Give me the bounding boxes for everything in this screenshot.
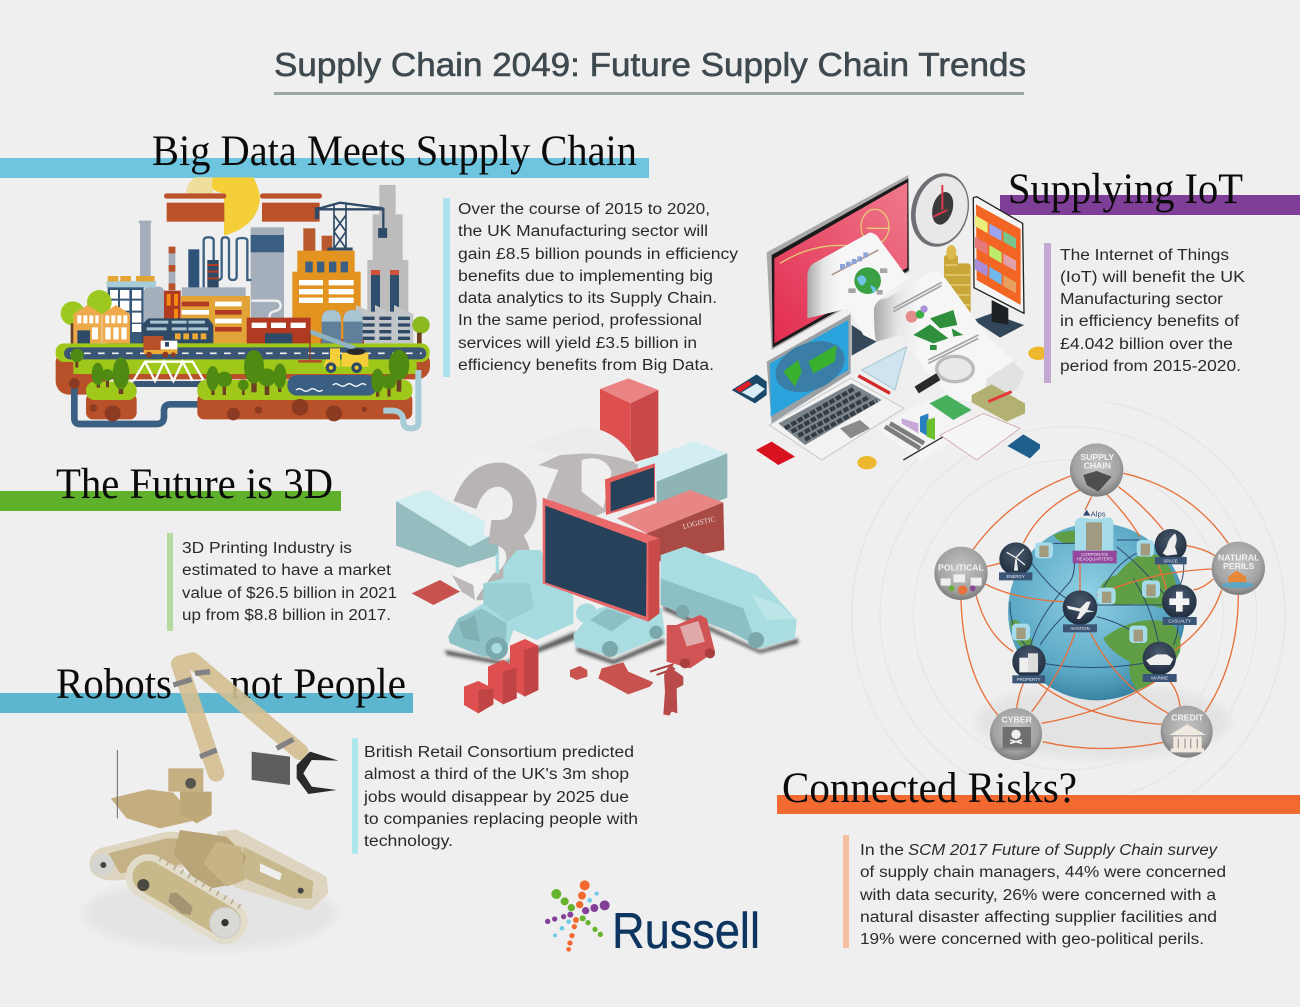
heading bar — [0, 491, 341, 511]
clouds — [164, 193, 322, 222]
car — [573, 602, 665, 657]
globe — [1008, 523, 1185, 700]
display panels — [543, 463, 659, 622]
heading bar — [0, 158, 649, 178]
panel: robots not people — [0, 661, 638, 950]
body text: almost a third of the UK's 3m shop — [364, 766, 629, 783]
heading: Big Data Meets Supply Chain — [152, 128, 637, 175]
navy links — [1010, 540, 1184, 667]
blue card — [1007, 434, 1040, 458]
body text: efficiency benefits from Big Data. — [458, 357, 714, 374]
antenna — [116, 750, 119, 818]
body text — [458, 201, 738, 374]
smartphone — [973, 197, 1024, 338]
body text: jobs would disappear by 2025 due — [363, 789, 629, 806]
front track — [148, 877, 225, 922]
yellow loader — [298, 332, 368, 373]
node: energy — [999, 542, 1033, 580]
body text — [363, 744, 638, 850]
body text: Over the course of 2015 to 2020, — [458, 201, 710, 218]
coin — [1028, 347, 1048, 360]
3d logistics illustration — [396, 378, 798, 716]
body text: £4.042 billion over the — [1060, 336, 1233, 353]
pallets and box — [570, 662, 653, 694]
heading bar — [1000, 195, 1300, 215]
body text: estimated to have a market — [182, 562, 392, 579]
network diagram — [852, 398, 1285, 832]
panel: big data meets supply chain — [0, 128, 738, 428]
hub: political: POLITICAL — [938, 562, 985, 572]
laptop — [767, 314, 904, 460]
hub: natural perils: NATURAL — [1218, 552, 1260, 562]
russell logo — [545, 880, 760, 959]
charts sheet — [877, 398, 977, 460]
forklift — [650, 615, 715, 675]
heading: Supplying IoT — [1008, 166, 1243, 213]
crane — [315, 203, 387, 249]
corporate headquarters: Alps — [1091, 509, 1106, 518]
body text: The Internet of Things — [1060, 247, 1229, 264]
body text: 3D Printing Industry is — [182, 540, 352, 557]
body text: SCM 2017 Future of Supply Chain survey — [908, 842, 1218, 859]
heading: Connected Risks? — [782, 765, 1077, 812]
factory skyline — [107, 185, 413, 344]
sprocket — [137, 879, 149, 891]
hub: political — [934, 547, 988, 600]
hub: supply chain — [1070, 443, 1123, 497]
heading: robots: Robots — [56, 661, 172, 708]
panel: supplying iot — [732, 166, 1300, 469]
hub: natural perils — [1212, 542, 1265, 595]
calculator — [732, 374, 767, 403]
hub: credit — [1161, 706, 1213, 758]
body text: gain £8.5 billion pounds in efficiency — [458, 246, 738, 263]
sun — [186, 177, 260, 236]
vehicle shadows — [445, 605, 798, 665]
heading: not people: not People — [230, 661, 406, 708]
body text — [182, 540, 397, 624]
accent rule — [167, 533, 173, 631]
delivery truck — [143, 336, 177, 358]
body text — [859, 842, 1226, 948]
corporate headquarters: HEADQUARTERS — [1077, 557, 1113, 562]
paper scroll with map — [874, 271, 1024, 402]
body text: benefits due to implementing big — [458, 268, 713, 285]
3D letters — [452, 426, 638, 600]
node: property — [1012, 645, 1046, 683]
body text: in efficiency benefits of — [1060, 313, 1240, 330]
body text: data analytics to its Supply Chain. — [458, 290, 717, 307]
corporate headquarters — [1073, 509, 1117, 563]
body text: (IoT) will benefit the UK — [1060, 269, 1246, 286]
logo wordmark: Russell — [612, 903, 760, 959]
track window — [168, 893, 193, 915]
node: aviation — [1063, 590, 1097, 632]
heading bar — [0, 693, 413, 713]
body text: with data security, 26% were concerned with a — [859, 887, 1216, 904]
accent rule — [1044, 243, 1051, 383]
body text: of supply chain managers, 44% were concerned — [860, 864, 1226, 881]
node: aviation: AVIATION — [1070, 626, 1090, 631]
hub: cyber: CYBER — [1002, 715, 1033, 725]
platform — [111, 768, 212, 828]
node: space: SPACE — [1163, 558, 1178, 563]
coins — [857, 456, 877, 469]
paper scroll with globe — [807, 232, 908, 342]
body text: to companies replacing people with — [364, 811, 638, 828]
Alps site domes — [1012, 540, 1160, 643]
panel: the future is 3d — [0, 378, 798, 716]
red container — [617, 490, 724, 562]
body text: In the — [860, 842, 904, 859]
heading: The Future is 3D — [56, 461, 333, 508]
robot illustration — [83, 661, 338, 950]
trees — [70, 349, 409, 397]
node: marine — [1143, 642, 1177, 682]
red bar blocks — [464, 639, 538, 713]
coin stacks — [944, 245, 971, 315]
set square and pencil — [858, 347, 907, 393]
body text: Manufacturing sector — [1060, 291, 1223, 308]
front wheel — [210, 907, 240, 938]
trees and houses — [61, 290, 430, 344]
corporate headquarters: CORPORATE — [1081, 552, 1108, 557]
track treads — [160, 858, 240, 907]
body text: up from $8.8 billion in 2017. — [182, 607, 391, 624]
worker — [663, 665, 683, 716]
gripper — [252, 752, 338, 794]
devices illustration — [732, 167, 1048, 469]
node: property: PROPERTY — [1017, 677, 1041, 682]
red container: LOGISTIC — [682, 514, 716, 531]
body text: technology. — [364, 833, 453, 850]
body text: British Retail Consortium predicted — [364, 744, 634, 761]
factory illustration — [56, 177, 430, 428]
node: marine: MARINE — [1151, 676, 1168, 681]
shadow — [83, 877, 337, 950]
ground and road — [56, 343, 430, 428]
body text: natural disaster affecting supplier facilities and — [860, 909, 1217, 926]
node: casualty: CASUALTY — [1168, 619, 1191, 624]
hub: credit: CREDIT — [1171, 713, 1204, 723]
red card — [756, 442, 795, 465]
body text: period from 2015-2020. — [1060, 358, 1241, 375]
body text: the UK Manufacturing sector will — [458, 223, 708, 240]
wall clock — [903, 167, 977, 253]
panel: connected risks — [777, 398, 1300, 948]
rear left track — [89, 832, 213, 880]
body text: services will yield £3.5 billion in — [458, 335, 697, 352]
body text: In the same period, professional — [458, 312, 702, 329]
magnifier — [917, 356, 973, 390]
accent rule — [443, 198, 450, 377]
hub: cyber — [990, 708, 1042, 760]
accent rule — [352, 738, 358, 854]
right container — [637, 441, 727, 525]
orange links — [961, 473, 1238, 749]
hub: supply chain: SUPPLY — [1080, 452, 1114, 462]
banknotes — [929, 384, 1025, 422]
front hub — [221, 919, 229, 926]
node: energy: ENERGY — [1007, 574, 1025, 579]
robot arm — [173, 661, 300, 773]
red pallet — [412, 580, 460, 605]
chassis — [173, 830, 247, 890]
title: Supply Chain 2049: Future Supply Chain Trends — [274, 46, 1026, 83]
logo dots — [545, 880, 610, 952]
left container — [396, 490, 500, 568]
desktop monitor — [767, 175, 909, 356]
rear right track — [217, 829, 328, 911]
node: space — [1155, 529, 1187, 564]
body text — [1060, 247, 1246, 375]
accent rule — [843, 835, 849, 948]
red tall box — [600, 378, 658, 463]
hub: supply chain: CHAIN — [1084, 461, 1111, 471]
node: casualty — [1162, 584, 1197, 625]
body text: 19% were concerned with geo-political perils. — [860, 931, 1204, 948]
body text: value of $26.5 billion in 2021 — [182, 585, 397, 602]
heading bar — [777, 795, 1300, 814]
hub: natural perils: PERILS — [1223, 561, 1255, 571]
van — [661, 547, 797, 648]
envelope — [940, 413, 1020, 460]
semi truck — [448, 550, 597, 660]
